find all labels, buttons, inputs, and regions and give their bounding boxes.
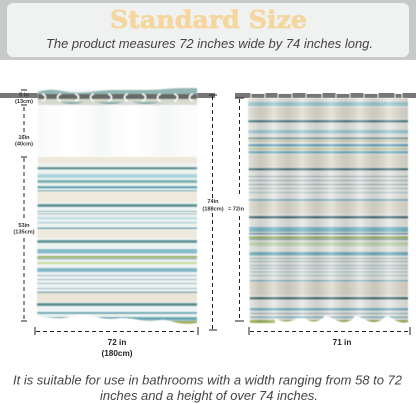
subtitle: The product measures 72 inches wide by 74 inches long. [46, 36, 373, 51]
left curtain with sheer window [37, 90, 198, 325]
footer text: inches and a height of over 74 inches. [100, 389, 318, 403]
dimension: 71 in width [249, 327, 410, 347]
dimension: left column height: 53in [18, 223, 30, 229]
right curtain [248, 98, 408, 326]
dimension: 72 in width: (180cm) [102, 349, 133, 358]
dimension: 72 in width [35, 327, 198, 358]
dimension: left column height: 16in [18, 135, 30, 141]
icon: grommets [42, 94, 193, 101]
dimension: left column height: 5 in [19, 92, 29, 98]
header band [0, 0, 416, 60]
dimension: 74in total height: (188cm) [202, 206, 224, 212]
footer text [13, 374, 402, 403]
dimension: 72in right curtain height: = 72in [228, 206, 245, 212]
dimension: left column height: (135cm) [13, 230, 35, 236]
right curtain rod [235, 93, 416, 98]
left curtain grommet header [38, 88, 197, 105]
dimension: 71 in width: 71 in [333, 338, 351, 347]
dimension: 74in total height [202, 95, 224, 330]
dimension: 72in right curtain height [228, 98, 245, 321]
footer text: It is suitable for use in bathrooms with a width ranging from 58 to 72 [13, 374, 402, 388]
dimension: left column height [13, 90, 35, 321]
dimension: left column height: (13cm) [15, 99, 33, 105]
right curtain hooks [251, 93, 402, 98]
title: Standard Size [110, 5, 307, 34]
dimension: left column height: (40cm) [15, 142, 33, 148]
left curtain rod [0, 93, 215, 98]
dimension: 72 in width: 72 in [108, 338, 126, 347]
dimension: 74in total height: 74in [207, 199, 219, 205]
